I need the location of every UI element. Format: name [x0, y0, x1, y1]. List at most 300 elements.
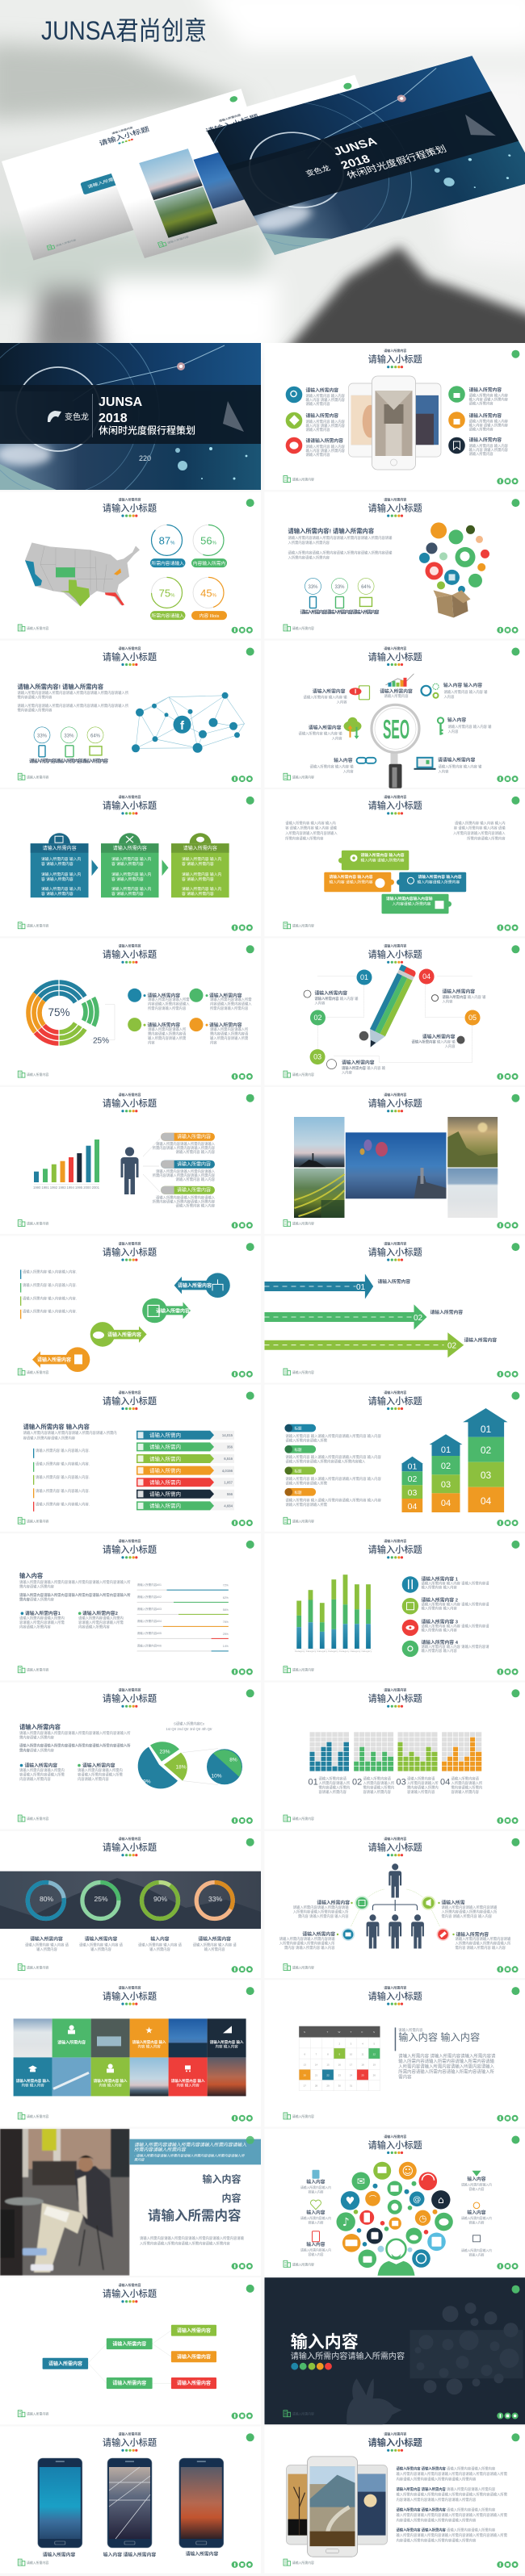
subheading 1: 请输入所需内容1 [25, 1610, 61, 1616]
legend list [33, 1448, 90, 1512]
hero cover tilted slide: 休闲时光度假行程策划 [344, 143, 448, 181]
slide header: 请输入小标题 [103, 1098, 157, 1109]
row 13 left: photo quote slide [0, 2129, 261, 2276]
captions: 请输入所需内容请 [451, 1776, 480, 1782]
label upper right: 输入内容 输入内容 [443, 682, 482, 688]
color dots [291, 2363, 332, 2370]
cloud glyphs: @ [413, 2195, 421, 2204]
box upper mid [107, 2338, 153, 2349]
key icon [438, 717, 443, 735]
laptop icon [414, 757, 436, 770]
heading text: 请输入所需内容 [398, 2027, 423, 2033]
legend 2: 请输入所需内容 [209, 993, 242, 999]
left items: 请输入所需内容输入内 [300, 2216, 331, 2220]
connector lines [143, 1139, 160, 1192]
feature text left: 请输入所需内容 [305, 452, 330, 458]
captions: 入所需内容请输入所 [451, 1780, 483, 1786]
slide footer [284, 1815, 519, 1824]
slide header [103, 1240, 254, 1261]
row 1 right: phones slide [265, 343, 525, 490]
waffle block 02 [354, 1732, 393, 1771]
row 10 right: waffle slide [265, 1683, 525, 1830]
legend 4: 需内容请输入所需内容请 [210, 1031, 249, 1037]
text block: 请输入所需内容请输入所需内容请输入所需内容请输入所需内容请输入所 [18, 690, 129, 696]
hero mockup panel [0, 0, 525, 359]
legend 1: 内容请输入所需内容请输入 [148, 1002, 190, 1007]
cover logo [48, 411, 89, 422]
text right: 所需内容请输入所需内容 [467, 836, 506, 842]
hero left tilted slide: 请输入所需内容 [111, 125, 133, 135]
slide header [103, 1984, 254, 2005]
phone captions [43, 2551, 218, 2558]
phone space [38, 2458, 82, 2548]
legend list: 请输入所需内容 输入内容输入内容. [23, 1269, 77, 1274]
bracket [373, 1900, 417, 1911]
legend list: 请输入所需内容 输入内容输入内容. [36, 1474, 90, 1480]
captions: 04 [440, 1778, 450, 1788]
photo terraces [294, 1169, 344, 1218]
right items: 输入内容 [467, 2176, 486, 2182]
feature text left [305, 387, 346, 458]
label upper right: 入内容 [444, 694, 455, 700]
paragraph: 入所需内容请输入所需内容请输入所需内容请输入所需内容 [140, 2240, 230, 2246]
subheading 2: 内容请输入所需内容 [78, 1776, 109, 1782]
icon 1: 请输入所需内容 1 [422, 1576, 459, 1583]
row 06 [136, 1490, 234, 1499]
label upper left: 入内容 [337, 699, 347, 705]
mosaic tile blue: 内容 输入内容 [21, 2082, 44, 2088]
label right: 请输入所需内容 输入内容 输 [447, 724, 492, 730]
subheading 1: 容请输入所需内容请输入所需 [19, 1772, 65, 1778]
slide footer: 请输入所需内容 [27, 924, 48, 928]
calendar: 12 [373, 2052, 376, 2055]
progress bars: 请输入所需内容#04 [137, 1619, 162, 1623]
row 04: 4,0156 [222, 1469, 233, 1473]
cover logo: 变色龙 [65, 412, 89, 422]
left items [300, 2170, 331, 2256]
slide background [265, 2427, 525, 2574]
house arrow tall: 02 [481, 1445, 491, 1456]
label flask: 请输入所需内容 输入内容 输 [443, 994, 486, 1000]
slide footer: 请输入所需内容 [27, 2412, 48, 2416]
slide header: 请输入所需内容 [118, 1984, 141, 1989]
legend 3: 需内容请输入所需内容请 [148, 1031, 187, 1037]
slide background [0, 1236, 261, 1382]
right items: 请输入所需内容输入内 [461, 2216, 492, 2220]
tag text [286, 1433, 382, 1508]
row 9 right: stacked bars slide [265, 1533, 525, 1680]
slide background [265, 1831, 525, 1978]
card green: 容 请输入所需内容 [111, 891, 144, 897]
calendar: 3 [351, 2042, 352, 2045]
top label: 请输入所需内容 [384, 693, 409, 699]
slide background [265, 1533, 525, 1680]
heading bar [395, 2027, 396, 2051]
label lower left: 请输入所需内容 [302, 1930, 335, 1937]
icon 2: 输入所需内容 输入内容 [422, 1606, 457, 1612]
slide header: 请输入所需内容 [384, 1538, 406, 1543]
row 01 [136, 1431, 234, 1440]
row 07: 4,684 [224, 1504, 233, 1508]
text block: 需内容请输入所需内容 [18, 707, 52, 713]
tag text: 请输入所需内容 输入请输入所需内容请输入所需内容 输入内容 [286, 1497, 382, 1503]
label bulb: 请输入所需内容 输入内容 输 [315, 996, 359, 1002]
slide header: 请输入所需内容 [384, 943, 406, 948]
small rings [34, 727, 103, 743]
phone captions: 请输入所需内容 [43, 2552, 75, 2558]
feature text right: 输入内容 请输入所需内容 [468, 397, 509, 402]
puzzle lime: 输入内容 请输入所需内容 [360, 858, 405, 864]
top label [380, 688, 413, 699]
captions: 01 [309, 1778, 318, 1788]
cloud glyphs: ☺ [401, 2165, 414, 2178]
slide footer: 请输入所需内容 [292, 924, 314, 928]
slide header [368, 1390, 519, 1410]
slide header [368, 348, 519, 368]
text right: 请输入所需内容 输入内容 输入内 [455, 821, 506, 826]
mosaic tile lime: 请输入所需内容 输入 [94, 2078, 128, 2084]
row 07 [136, 1501, 234, 1510]
puzzle orange: 输入内容 请输入所需内容 [330, 880, 373, 885]
pill lime: 请输入所需内容请输入所需内容请输入 [156, 1194, 216, 1201]
label bulb [304, 990, 359, 1006]
calendar: 22 [326, 2073, 330, 2076]
box lime [171, 2325, 216, 2336]
row 05: 请输入所需内 [149, 1478, 181, 1486]
circle green [355, 1896, 369, 1910]
subheading 2: 容请输入所需内容请输入所需 [78, 1620, 124, 1625]
slide footer [284, 922, 519, 931]
chain icon [357, 758, 376, 763]
cloud glyphs: ⌒ [369, 2195, 376, 2204]
slide footer: 请输入所需内容 [27, 1222, 48, 1225]
calendar: 27 [304, 2084, 306, 2087]
small rings: 33% [64, 734, 74, 738]
calendar: 2 [338, 2042, 340, 2045]
pie left: 18% [175, 1765, 187, 1771]
slide header: 请输入所需内容 [118, 1836, 141, 1841]
connectors [88, 2331, 171, 2383]
cover title: 休闲时光度假行程策划 [99, 424, 195, 436]
slide background [265, 1087, 525, 1234]
row 9 left: progress slide [0, 1533, 261, 1680]
caption 3: 输入内容 [150, 1935, 170, 1942]
text block [19, 1572, 131, 1603]
slide header: 请输入所需内容 [118, 1687, 141, 1692]
label lower right: 请请输入所需内容 [438, 756, 476, 763]
feature text left: 请请输入所需内容 [305, 437, 343, 444]
slide header: 请输入所需内容 [384, 1984, 406, 1989]
left items: 容输入内容 [309, 2252, 324, 2256]
ring 90% [135, 1876, 185, 1926]
feature text right: 请输入所需内容 输入内容 [468, 443, 509, 449]
caption 4 [193, 1935, 237, 1952]
phone left [349, 383, 381, 457]
slide header: 请输入所需内容 [384, 1390, 406, 1395]
house arrow tall: 01 [481, 1424, 491, 1435]
subheading 1: 请输入所需内容请输入所需内 [19, 1767, 65, 1773]
slide background [265, 491, 525, 638]
slide footer: 请输入所需内容 [292, 1370, 314, 1374]
slide header: 请输入所需内容 [118, 2432, 141, 2436]
text block: 入所需内容请输入所需内容 [288, 540, 330, 546]
text block: 请输入所需内容请输入所需内容请输入所需内容请输入所需内容请输 [288, 550, 393, 555]
label pills: 内容输入所需内 [193, 560, 225, 567]
label atom: 入内容 [342, 1070, 353, 1076]
label upper left: 需内容 请输入所需内容 输入内容 [298, 1913, 349, 1919]
text left: 容 请输入所需内容 输入内容 请输 [285, 826, 338, 831]
text block: 请输入所需内容请输入所需内容请输入所需内容请输入所需内容请输入所 [19, 1743, 131, 1749]
tag text: 请输入所需内容请输入所需内容请输入所需内容输入 [286, 1458, 366, 1464]
label flask: 请输入所需内容 [443, 989, 475, 995]
row 06: 请输入所需内 [149, 1491, 181, 1498]
tag list: 标题 [294, 1426, 302, 1432]
captions: 入所需内容请输入所 [318, 1780, 351, 1786]
label flask lower: 请输入所需内容 [422, 1034, 456, 1040]
slide header: 请输入所需内容 [384, 1836, 406, 1841]
subheading 1 [19, 1610, 65, 1630]
house arrow tall: 03 [481, 1470, 491, 1481]
paragraph: 需内容 [398, 2073, 412, 2080]
calendar: 11 [361, 2052, 364, 2055]
card lime: 请输入所需内容 输入内 [182, 886, 222, 892]
caption 1: 请输入所需内容 输入内容 请 [25, 1942, 69, 1948]
card lime: 容 请输入所需内容 [182, 891, 214, 897]
label pills: 内容 Illois [200, 613, 219, 619]
hero middle tilted slide: 请输入小标题 [204, 112, 260, 136]
legend 2: 内容请输入所需内容请输入 [210, 1002, 252, 1007]
slide header: 请输入所需内容 [384, 646, 406, 650]
step circles [310, 968, 480, 1064]
cloud icon [344, 717, 362, 739]
icon 2: 请输入所需内容 输入内容 请输入所需内容请 [422, 1602, 489, 1608]
label lower left: 请输入所需内容请输入所需内容请输 [279, 1936, 335, 1942]
road arrow 01: 请输入所需内容 [378, 1278, 410, 1285]
slide header: 请输入小标题 [103, 1693, 157, 1704]
progress bars: 请输入所需内容#03 [137, 1607, 162, 1611]
slide header: 请输入小标题 [368, 353, 422, 365]
slide header [103, 1092, 254, 1112]
hero cover tilted slide: JUNSA [331, 135, 380, 158]
house arrow medium: 03 [441, 1480, 451, 1490]
text right [453, 821, 506, 842]
puzzle lime: 请输入所需内容 输入内容 [360, 852, 405, 858]
hero cover tilted slide: 变色龙 [304, 164, 332, 178]
progress bars: 76% [223, 1620, 229, 1624]
slide header [368, 2134, 519, 2154]
slide footer: 请输入所需内容 [292, 2561, 314, 2565]
subheading 2: 请输入所需内容请输入所需内 [78, 1767, 123, 1773]
card blue: 容 请输入所需内容 [41, 891, 74, 897]
card green: 请输入所需内容 输入内 [111, 872, 152, 877]
slide footer [18, 1369, 253, 1378]
slide header: 请输入小标题 [368, 2437, 422, 2448]
legend list: 请输入所需内容 输入内容输入内容. [23, 1295, 77, 1301]
mosaic tile red [169, 2057, 208, 2096]
left items: 容输入内容 [309, 2189, 324, 2193]
card green: 容 请输入所需内容 [111, 861, 144, 867]
calendar: 15 [326, 2063, 330, 2066]
row 13 right: icon cloud slide [265, 2129, 525, 2276]
text left [285, 821, 338, 842]
label lower right: 需内容 请输入所需内容 输入内容 [456, 1945, 506, 1951]
ring 75%: 75% [159, 587, 175, 599]
pill orange: 请输入所需内容请输入所需内容请输入 [156, 1141, 216, 1147]
pill orange: 所需内容请输入所需内容请输入所需内容 [153, 1145, 216, 1151]
hero brand title: JUNSA君尚创意 [41, 16, 207, 45]
label upper right [438, 1900, 498, 1919]
mosaic tile navy: 内容 输入内容 [215, 2043, 238, 2049]
road arrow 01: 01 [356, 1283, 365, 1292]
network lines [136, 696, 245, 748]
row 12 right: calendar slide [265, 1980, 525, 2126]
mosaic tile blue [14, 2057, 52, 2096]
calendar: S [373, 2030, 375, 2034]
mosaic tile orange: ★ [145, 2025, 153, 2035]
progress bars: 请输入所需内容#01 [137, 1583, 162, 1587]
section heading: 请输入所需内容请输入所需内容 [291, 2351, 405, 2361]
stacked bar chart: Category Category Category Category Category Category Category [295, 1650, 372, 1653]
tablet icon [349, 686, 370, 700]
mosaic tile red: 请输入所需内容 输入 [171, 2078, 205, 2084]
donut value 75%: 75% [48, 1006, 70, 1018]
text group 1: 请输入所需内容 请输入所需内容 请输入所需内容请输入所需内容 [396, 2466, 496, 2472]
caption 1: 输入所需内容 [36, 1947, 58, 1952]
slide footer: 请输入所需内容 [292, 1073, 314, 1077]
calendar: 21 [315, 2073, 317, 2076]
hero blurred background [0, 0, 525, 359]
right items: 请输入所需内容输入内 [461, 2182, 492, 2186]
caption 2 [79, 1935, 124, 1952]
slide background [0, 491, 261, 638]
calendar: F [362, 2030, 363, 2034]
icon 2: 请输入所需内容 2 [422, 1597, 458, 1604]
row 2 left: map slide [0, 491, 261, 638]
text block [288, 527, 393, 560]
slide header: 请输入小标题 [368, 2139, 422, 2151]
left items: 输入内容 [306, 2241, 326, 2248]
cloud glyphs [342, 2165, 449, 2263]
row 14 left: flow boxes slide [0, 2277, 261, 2424]
legend 3 [128, 1018, 187, 1046]
label upper right: 入所需内容请输入所需内容请输入所 [441, 1909, 498, 1914]
house arrow short: 01 [408, 1462, 417, 1471]
card green: 容 请输入所需内容 [111, 876, 144, 882]
dotted connectors [318, 976, 473, 1063]
legend 1: 请输入所需内容请输入所需 [148, 997, 190, 1002]
feature icons left [286, 387, 302, 454]
text block: 请输入所需内容请输入所需内容请输入所需内容请输入所需内容请输入所 [19, 1579, 131, 1585]
cloud glyphs: ✉ [357, 2176, 365, 2187]
row 12 left: mosaic slide [0, 1980, 261, 2126]
row 02 [136, 1442, 234, 1451]
slide footer [18, 1071, 253, 1080]
icon 1 [402, 1576, 489, 1593]
pill blue [153, 1160, 216, 1182]
slide header [103, 943, 254, 964]
mosaic tile orange: 请输入所需内容 输入 [132, 2039, 166, 2045]
slide footer: 请输入所需内容 [292, 478, 314, 481]
text left: 请输入所需内容 输入内容 输入内 [285, 821, 336, 826]
slide background [265, 2277, 525, 2424]
small rings: 33% [308, 585, 318, 590]
slide footer: 请输入所需内容 [27, 1668, 48, 1672]
label atom [326, 1060, 386, 1076]
slide footer: 请输入所需内容 [27, 1519, 48, 1523]
card lime: 容 请输入所需内容 [182, 876, 214, 882]
pill blue: 所需内容请输入所需内容请输入所需内容 [153, 1173, 216, 1178]
label lower left: 入所需内容请输入所需内容请输入所 [279, 1940, 335, 1947]
mosaic tile blue: 请输入所需内容 输入 [16, 2078, 50, 2084]
phone captions: 输入内容 请输入所需内容 [103, 2552, 156, 2558]
label lower right: 入所需内容请输入所需内容请输入所 [456, 1940, 511, 1947]
arrow key green [142, 1298, 191, 1323]
paragraph: 输入所需内容请输入所需内容请输入所需内容请输 [398, 2058, 495, 2064]
legend 4: 输入所需内容请输入所需 [210, 1035, 249, 1041]
slide background [265, 2129, 525, 2276]
section heading: 输入内容 [291, 2332, 359, 2352]
slide footer: 请输入所需内容 [27, 775, 48, 779]
tag text: 请输入所需内容 输入请输入所需内容请输入所需内容 输入内容 [286, 1433, 382, 1439]
waffle block 01 [310, 1732, 349, 1771]
slide background [0, 2427, 261, 2574]
slide footer [284, 1220, 519, 1228]
faint bird [346, 2378, 402, 2424]
row 03 [136, 1454, 234, 1463]
puzzle lime [338, 851, 409, 870]
slide footer [18, 1815, 253, 1824]
slide footer [284, 1517, 519, 1526]
phone captions: 请输入所需内容 [186, 2551, 218, 2557]
slide header: 请输入小标题 [103, 502, 157, 513]
calendar: S [304, 2030, 305, 2034]
calendar [299, 2026, 380, 2091]
left items: 请输入所需内容输入内 [300, 2185, 331, 2189]
slide background [0, 1385, 261, 1532]
card green [101, 833, 158, 897]
cover title [99, 395, 195, 436]
row 6 right: photo collage slide [265, 1087, 525, 1234]
text block: 请输入所需内容请输入所需内容请输入所需内容请输入所需内 [23, 1430, 117, 1436]
puzzle blue: 请输入所需内容 输入内容 [418, 874, 462, 880]
subheading 2: 请输入所需内容 [82, 1763, 116, 1769]
mosaic tile navy [208, 2018, 246, 2057]
small rings: 64% [361, 585, 372, 590]
row 04 [136, 1466, 234, 1475]
house arrow tall [463, 1408, 507, 1512]
slide footer: 请输入所需内容 [292, 1817, 314, 1821]
house arrow medium: 01 [441, 1445, 451, 1455]
label right: 输入内容 [447, 717, 466, 723]
card lime [171, 833, 229, 897]
calendar: 23 [338, 2073, 341, 2076]
page badge [246, 2136, 254, 2144]
slide footer [284, 2559, 519, 2568]
captions [309, 1776, 483, 1795]
right items: 输入内容 [467, 2209, 486, 2215]
arrow key lime [90, 1322, 147, 1347]
faint icon circle [410, 2302, 523, 2394]
pie connectors [183, 1749, 218, 1785]
icon 4: 请输入所需内容 输入内容 请输入所需内容请 [422, 1644, 489, 1650]
slide footer: 请输入所需内容 [27, 1370, 48, 1374]
label atom: 请输入所需内容 [342, 1060, 375, 1066]
label right: 入内容 [447, 729, 459, 734]
photo sky [294, 1117, 344, 1167]
label upper left: 请输入所需内容请输入所需内容请输 [293, 1905, 349, 1910]
label upper left: 入所需内容请输入所需内容请输入所 [293, 1909, 349, 1914]
text right: 容 请输入所需内容 输入内容 请输 [454, 826, 506, 831]
